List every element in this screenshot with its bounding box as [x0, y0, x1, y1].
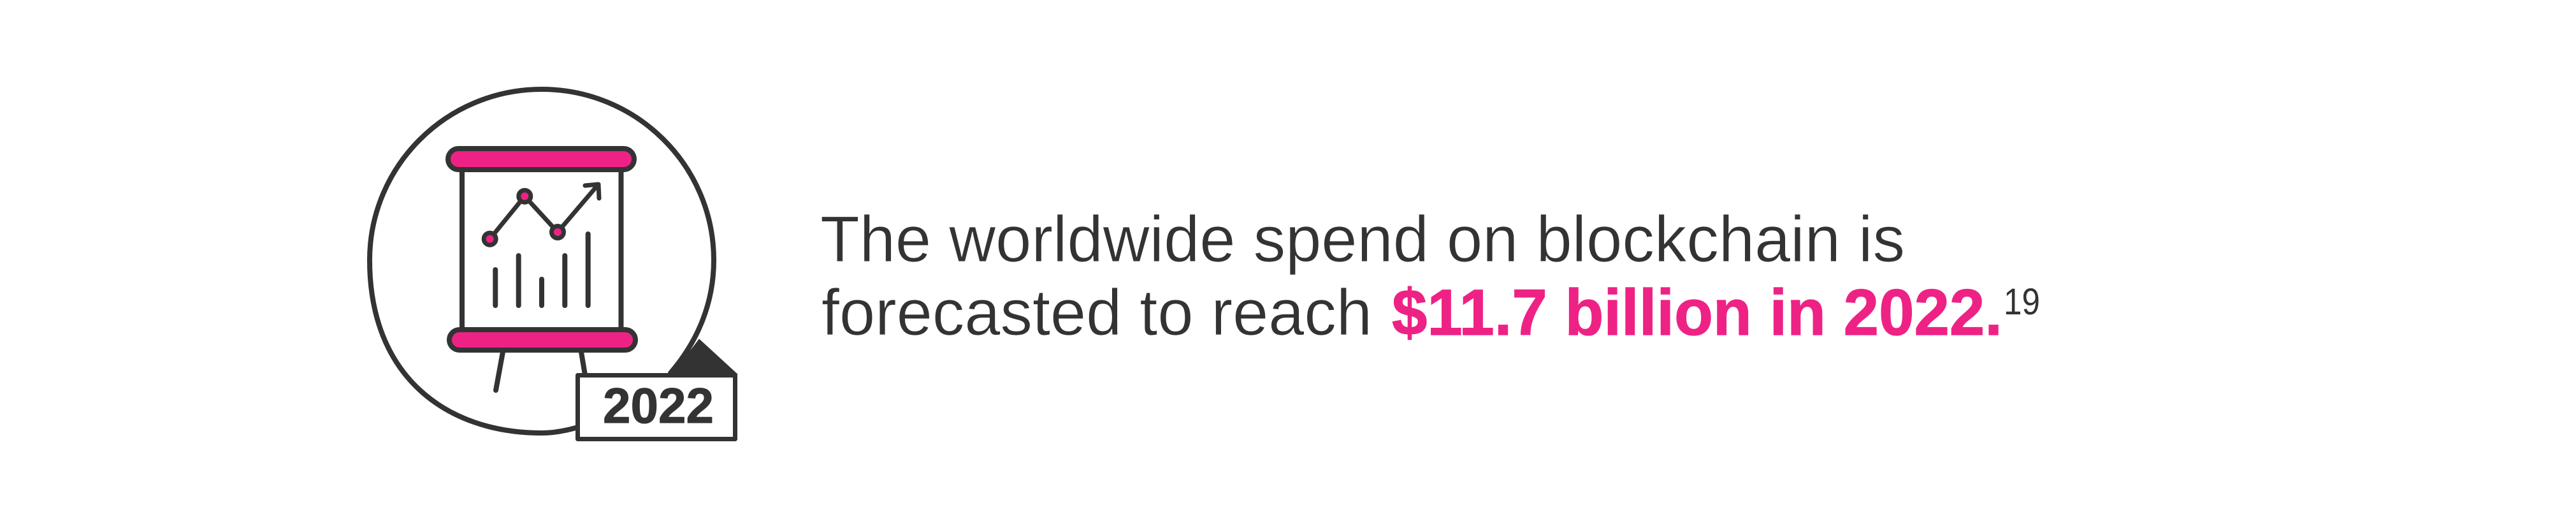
stand legs [496, 352, 585, 390]
year tag: 2022 [603, 378, 714, 434]
year tag [577, 375, 735, 439]
icon: presentation board in blob [370, 89, 737, 439]
year tag fold [670, 339, 737, 374]
line 1: The worldwide spend on blockchain is [820, 203, 1905, 275]
bottom roller [449, 330, 635, 350]
line 2: forecasted to reach [821, 276, 1372, 349]
footnote reference: 19 [2004, 281, 2040, 323]
bar chart [495, 234, 588, 305]
blob outline [370, 89, 714, 433]
line chart with arrow [484, 184, 599, 245]
highlighted figure: $11.7 billion in 2022. [1392, 276, 2002, 349]
screen sides [462, 169, 621, 330]
statement text [820, 203, 2040, 349]
top roller [448, 149, 634, 170]
